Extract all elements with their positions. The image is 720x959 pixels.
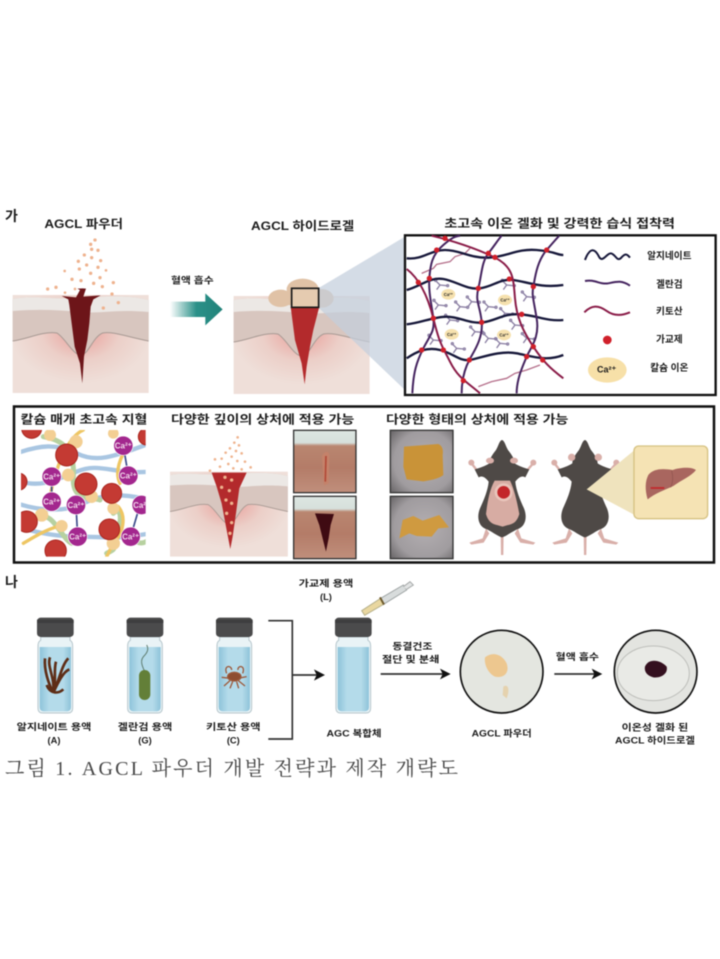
illustration: calcium mediated clotting: Ca²⁺ <box>43 473 60 482</box>
panel: hemostasis and wound applications frame <box>14 406 714 562</box>
icon: syringe <box>362 582 413 615</box>
liver callout <box>587 446 708 519</box>
crosslinker label <box>299 578 353 602</box>
legend: gellan gum: 겔란검 <box>656 278 683 290</box>
heading: various shape wounds: 다양한 형태의 상처에 적용 가능 <box>386 412 569 426</box>
heading: AGCL powder: AGCL 파우더 <box>44 217 123 231</box>
vial: alginate solution: 알지네이트 용액 <box>17 721 91 732</box>
step arrow: blood absorption <box>554 651 602 679</box>
photo: irregular powder patch <box>390 496 453 559</box>
molecules <box>428 279 535 353</box>
legend <box>584 250 692 383</box>
polymer network diagram <box>407 236 563 393</box>
skin section with hydrogel <box>234 237 405 394</box>
step arrow: blood absorption: 혈액 흡수 <box>556 651 599 662</box>
panel: preparation steps left <box>17 578 381 745</box>
legend: calcium ion: Ca²⁺ <box>597 365 617 375</box>
crosslinker label: (L) <box>320 592 332 602</box>
icon: seaweed <box>45 657 69 693</box>
panel: top left powder and hydrogel illustrations <box>13 217 405 394</box>
vial: gellan solution: 겔란검 용액 <box>118 721 172 732</box>
illustration: calcium mediated clotting <box>20 429 146 558</box>
chitosan strands <box>407 236 563 393</box>
vial: gellan solution: (G) <box>138 735 152 745</box>
hydrogel blob <box>268 279 334 308</box>
panel: ionic gelation network and legend <box>405 216 716 395</box>
photo: square powder patch <box>390 430 453 493</box>
label: AGC composite: AGC 복합체 <box>326 728 381 739</box>
vial: chitosan solution: 키토산 용액 <box>206 721 261 732</box>
crosslinker dots <box>416 236 549 383</box>
skin section with powder filled wound <box>170 436 288 557</box>
photo: ionically gelled hydrogel <box>614 630 697 745</box>
calcium ions in network: Ca²⁺ <box>444 292 453 297</box>
step arrow: freeze drying: 동결건조 <box>392 640 433 651</box>
mouse: ventral view with wound <box>468 440 536 555</box>
photo: ionically gelled hydrogel: AGCL 하이드로겔 <box>615 734 695 745</box>
legend: calcium ion: 칼슘 이온 <box>650 362 689 374</box>
calcium ions in network: Ca²⁺ <box>447 332 456 337</box>
vial: alginate solution <box>17 618 91 745</box>
panel: various shapes application <box>386 412 708 559</box>
vial: gellan solution <box>118 618 172 745</box>
illustration: calcium mediated clotting: Ca²⁺ <box>120 472 137 481</box>
icon: crab <box>222 667 247 688</box>
blood absorption arrow <box>170 275 223 325</box>
heading: various depth wounds: 다양한 깊이의 상처에 적용 가능 <box>171 412 355 426</box>
legend: crosslinker: 가교제 <box>656 333 683 345</box>
photo: ionically gelled hydrogel: 이온성 겔화 된 <box>622 722 688 733</box>
step arrow: freeze drying: 절단 및 분쇄 <box>382 654 439 665</box>
panel: calcium hemostasis and depth application <box>10 412 356 561</box>
powder particles <box>46 238 120 310</box>
step arrow: freeze drying <box>381 640 451 679</box>
vial: chitosan solution: (C) <box>227 735 240 745</box>
calcium ions in network: Ca²⁺ <box>500 298 510 303</box>
vial: chitosan solution <box>206 618 261 745</box>
zoom projection cone <box>319 237 405 390</box>
network frame <box>405 235 716 395</box>
panel: preparation steps right <box>362 582 697 745</box>
caption: 그림 1. AGCL 파우더 개발 전략과 제작 개략도 <box>5 757 458 780</box>
photo: tissue incision with blood clot <box>294 496 356 559</box>
vial: AGC composite <box>335 618 372 713</box>
pink chain fragments <box>422 248 540 387</box>
calcium ions in network: Ca²⁺ <box>499 333 509 338</box>
icon: liver <box>646 468 696 499</box>
vial: alginate solution: (A) <box>48 735 60 745</box>
illustration: calcium mediated clotting: Ca²⁺ <box>67 501 85 510</box>
illustration: calcium mediated clotting: Ca²⁺ <box>133 501 150 510</box>
legend: alginate: 알지네이트 <box>647 250 692 262</box>
heading: gelation and adhesion: 초고속 이온 겔화 및 강력한 습식 접착력 <box>444 216 675 231</box>
calcium ions in network <box>441 289 512 340</box>
illustration: calcium mediated clotting: Ca²⁺ <box>43 498 60 507</box>
crosslinker label: 가교제 용액 <box>299 578 353 589</box>
wound: dark clotted blood <box>62 288 101 383</box>
legend: calcium ion <box>588 357 689 383</box>
photo: AGCL powder <box>460 630 543 739</box>
magnified region box <box>292 288 319 307</box>
alginate strands <box>407 250 563 360</box>
illustration: calcium mediated clotting: Ca²⁺ <box>69 533 86 542</box>
photo: closed tissue incision <box>294 430 356 493</box>
wound filled with blood <box>291 307 319 384</box>
photo: AGCL powder: AGCL 파우더 <box>472 729 532 739</box>
illustration: calcium mediated clotting: Ca²⁺ <box>122 533 139 542</box>
skin section with wound and powder <box>13 238 149 393</box>
blood absorption arrow: 혈액 흡수 <box>171 275 214 286</box>
mouse: dorsal view <box>551 440 619 555</box>
bracket arrow <box>268 621 325 739</box>
icon: bacterium <box>142 645 148 671</box>
section label: 가: 가 <box>5 208 18 224</box>
illustration: calcium mediated clotting: Ca²⁺ <box>115 442 132 451</box>
heading: AGCL hydrogel: AGCL 하이드로겔 <box>251 219 354 233</box>
section label: 나: 나 <box>5 574 18 590</box>
gellan strands <box>412 236 559 393</box>
heading: calcium mediated hemostasis: 칼슘 매개 초고속 지혈 <box>21 412 147 426</box>
legend: chitosan: 키토산 <box>656 305 683 317</box>
